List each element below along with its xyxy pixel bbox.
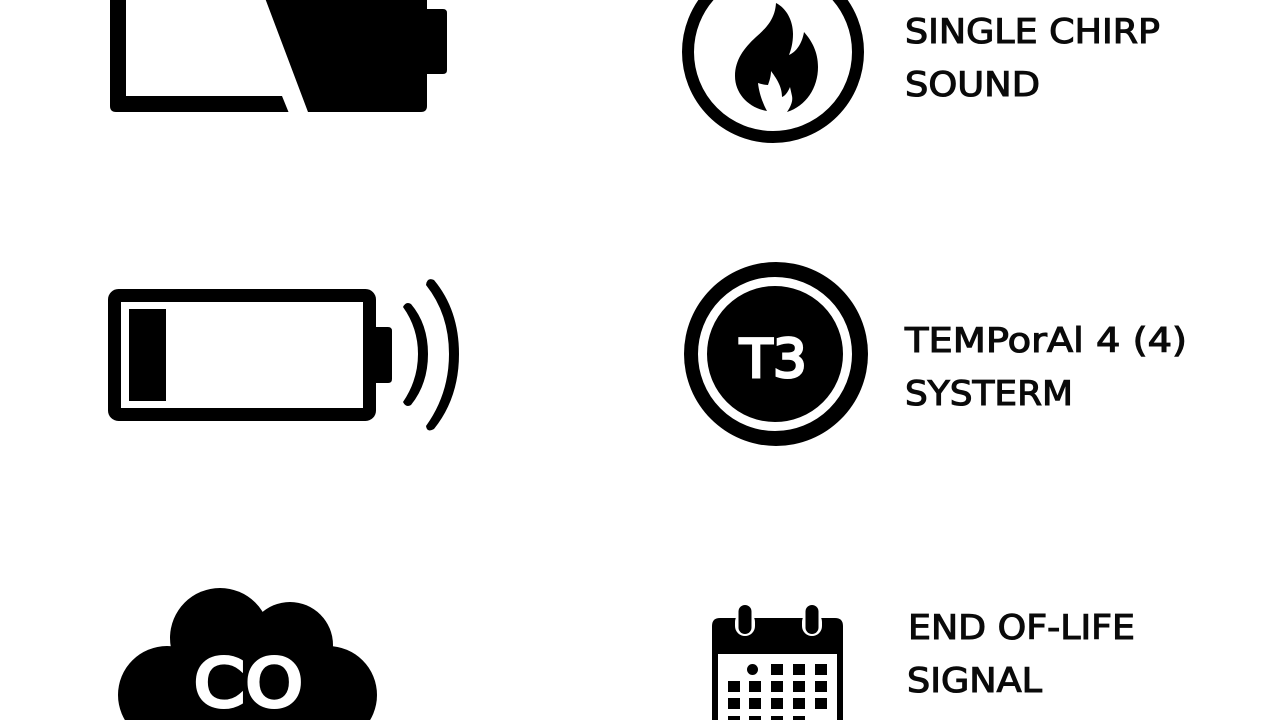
icon: calendar: [712, 605, 843, 720]
icon: low battery with sound waves: [114, 279, 459, 430]
icon: half-charged battery: [110, 0, 447, 112]
label: temporal 4 system: TEMPorAl 4 (4): [904, 321, 1187, 361]
label: temporal 4 system: [904, 321, 1187, 414]
icon: T3 badge: [684, 262, 868, 446]
label: single chirp sound: [905, 12, 1160, 105]
label: end-of-life signal: SIGNAL: [907, 661, 1042, 701]
label: single chirp sound: SOUND: [905, 65, 1040, 105]
label: temporal 4 system: SYSTERM: [905, 374, 1073, 414]
label: end-of-life signal: END OF-LIFE: [908, 608, 1135, 648]
icon: CO cloud: CO: [194, 646, 303, 720]
label: end-of-life signal: [907, 608, 1135, 701]
icon: flame in circle: [688, 0, 858, 137]
label: single chirp sound: SINGLE CHIRP: [905, 12, 1160, 52]
icon: T3 badge: T3: [739, 329, 807, 390]
icon: CO cloud: [118, 588, 377, 720]
